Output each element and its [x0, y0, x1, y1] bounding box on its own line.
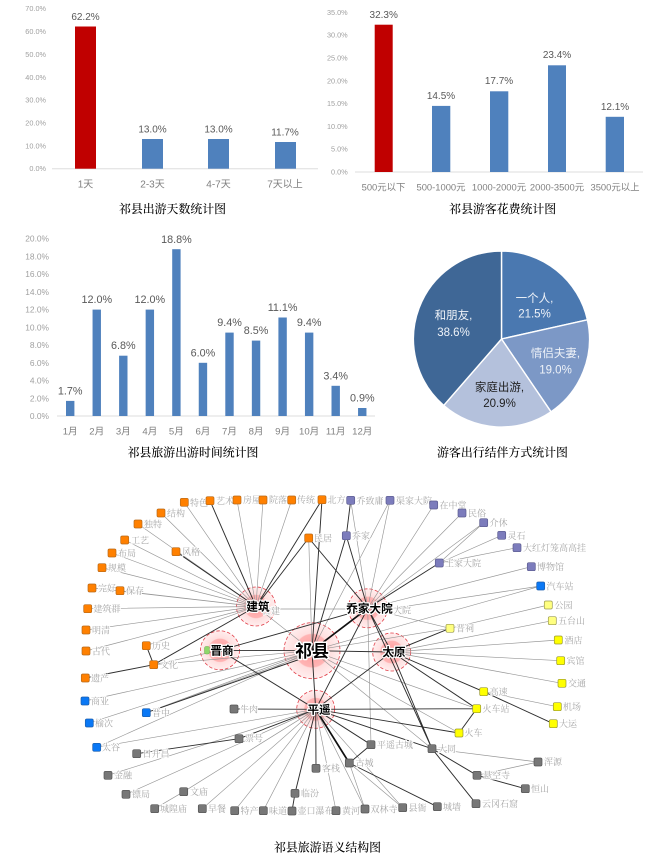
hub labels: 建筑: [246, 600, 270, 614]
bar chart: trip duration: 62.2%: [71, 12, 100, 23]
nodes: blue places: 商业: [91, 694, 109, 708]
bar chart: travel month: 0.9%: [350, 392, 375, 404]
nodes: Pingyao cluster: 县衙: [408, 801, 427, 814]
nodes: architecture cluster: 房屋: [243, 493, 261, 506]
nodes: architecture cluster: 独特: [144, 518, 162, 530]
nodes: Pingyao cluster: 壶口瀑布: [298, 804, 334, 817]
nodes: architecture cluster: 明清: [92, 624, 110, 636]
network graph: tourism semantic structure: [81, 493, 586, 817]
nodes: architecture cluster: 历史: [152, 639, 170, 652]
nodes: architecture cluster: 特色: [190, 496, 208, 509]
bar chart: travel month: 10月: [299, 426, 319, 438]
nodes: courtyard cluster: 灵石: [508, 529, 526, 542]
nodes: architecture cluster: [81, 493, 346, 684]
nodes: Pingyao cluster: 城隍庙: [160, 802, 187, 815]
pie labels: [435, 292, 580, 410]
bar chart: travel month: 12.0%: [135, 294, 166, 306]
nodes: architecture cluster: 风格: [182, 545, 200, 558]
bar chart: travel month: 20.0%: [25, 234, 50, 244]
nodes: Pingyao cluster: 悬空寺: [483, 768, 510, 782]
bar chart: trip duration: [25, 4, 318, 191]
bar chart: travel month: 11月: [326, 426, 345, 438]
nodes: transport and lodging: 高速: [490, 685, 508, 698]
bar chart: tourist spending: 35.0%: [327, 8, 348, 17]
hidden hub labels: [262, 604, 411, 617]
bar chart: trip duration: 20.0%: [25, 118, 46, 128]
nodes: Pingyao cluster: 日升昌: [142, 747, 170, 760]
nodes: transport and lodging: 宾馆: [566, 654, 585, 667]
nodes: courtyard cluster: 大红灯笼高高挂: [523, 541, 586, 554]
nodes: Pingyao cluster: 文庙: [190, 785, 208, 798]
title: travel month: 祁县旅游出游时间统计图: [128, 444, 259, 461]
bar chart: travel month: 16.0%: [25, 269, 50, 279]
bar chart: tourist spending: 12.1%: [601, 102, 629, 113]
nodes: transport and lodging: 火车: [464, 726, 483, 739]
nodes: Pingyao cluster: 临汾: [301, 786, 319, 800]
slice: family 20.9%: [444, 339, 551, 427]
nodes: architecture cluster: 艺术: [216, 494, 234, 507]
hub labels: [210, 600, 406, 716]
nodes: architecture cluster: 古代: [92, 644, 110, 658]
bar chart: tourist spending: 500元以下: [362, 182, 405, 192]
hub labels: 晋商: [210, 644, 234, 658]
bar chart: tourist spending: 30.0%: [327, 31, 348, 40]
bar chart: travel month: 12.0%: [81, 294, 112, 306]
nodes: architecture cluster: 保存: [126, 584, 144, 597]
nodes: courtyard cluster: 介休: [490, 516, 508, 529]
bar chart: travel month: 8.5%: [244, 325, 269, 337]
nodes: scenic spots: [446, 598, 585, 634]
nodes: Pingyao cluster: 味道: [269, 804, 287, 817]
nodes: Pingyao cluster: 恒山: [531, 782, 549, 795]
bar chart: tourist spending: 10.0%: [327, 122, 348, 131]
nodes: Pingyao cluster: 牛肉: [240, 702, 258, 716]
bar chart: tourist spending: 5.0%: [331, 145, 348, 154]
bar chart: trip duration: 13.0%: [204, 124, 233, 136]
nodes: Pingyao cluster: 特产: [240, 804, 259, 817]
nodes: architecture cluster: 传统: [297, 493, 315, 506]
bar chart: travel month: 7月: [222, 426, 237, 438]
nodes: transport and lodging: 交通: [568, 676, 586, 690]
hub halos: [200, 587, 411, 728]
bar chart: travel month: 3月: [116, 426, 131, 438]
bar chart: travel month: 14.0%: [25, 287, 50, 297]
bar chart: trip duration: 50.0%: [25, 50, 46, 59]
bar chart: travel month: 18.0%: [25, 251, 50, 261]
bar chart: travel month: 11.1%: [268, 302, 298, 314]
bar chart: trip duration: 4-7天: [206, 180, 231, 190]
nodes: transport and lodging: 机场: [563, 700, 581, 713]
nodes: Pingyao cluster: 云冈石窟: [482, 797, 518, 810]
heavy edges: [312, 608, 368, 763]
nodes: Pingyao cluster: 浑源: [544, 755, 563, 768]
hub labels: 太原: [382, 645, 406, 659]
bar chart: tourist spending: 3500元以上: [591, 182, 639, 192]
bar chart: trip duration: 70.0%: [25, 4, 46, 13]
nodes: courtyard cluster: 民俗: [468, 506, 486, 520]
hub labels: 平遥: [307, 704, 331, 716]
hub labels: 乔家大院: [346, 602, 393, 616]
bar chart: tourist spending: 1000-2000元: [472, 182, 526, 192]
bar chart: travel month: [25, 234, 375, 438]
bar chart: travel month: 2月: [89, 426, 104, 438]
pie labels: 情侣夫妻,: [531, 346, 580, 360]
bar chart: trip duration: 1天: [78, 180, 93, 190]
title: trip duration: 祁县出游天数统计图: [119, 200, 226, 217]
bar chart: trip duration: 0.0%: [29, 164, 47, 173]
nodes: scenic spots: 晋祠: [456, 622, 474, 634]
bar chart: tourist spending: 500-1000元: [416, 182, 466, 192]
nodes: Pingyao cluster: 平遥古城: [377, 738, 413, 751]
slice: alone 21.5%: [502, 251, 587, 339]
bar chart: travel month: 8月: [249, 426, 264, 438]
nodes: transport and lodging: 火车站: [482, 702, 510, 715]
nodes: transport and lodging: 大运: [559, 717, 578, 730]
bar chart: tourist spending: 15.0%: [327, 99, 348, 108]
bar chart: tourist spending: 32.3%: [370, 10, 398, 21]
slice: couple 19.0%: [502, 320, 590, 412]
nodes: Pingyao cluster: 黄河: [342, 804, 360, 817]
nodes: blue places: 汽车站: [546, 580, 574, 592]
nodes: blue places: [81, 580, 574, 754]
bar chart: trip duration: 10.0%: [25, 141, 46, 150]
nodes: blue places: 晋中: [152, 706, 170, 719]
nodes: architecture cluster: 院落: [269, 493, 287, 506]
nodes: Pingyao cluster: 大同: [438, 742, 456, 755]
nodes: courtyard cluster: 乔家: [352, 529, 370, 542]
pie labels: 20.9%: [483, 398, 516, 410]
nodes: architecture cluster: 布局: [118, 546, 136, 560]
nodes: courtyard cluster: 在中堂: [440, 498, 467, 512]
nodes: Pingyao cluster: 早餐: [208, 802, 226, 815]
bar chart: trip duration: 7天以上: [267, 178, 303, 190]
title: tourist spending: 祁县游客花费统计图: [449, 200, 556, 217]
nodes: transport and lodging: 酒店: [564, 634, 583, 646]
title: travel companions: 游客出行结伴方式统计图: [437, 444, 568, 461]
bar chart: trip duration: 11.7%: [271, 128, 299, 138]
pie labels: 和朋友,: [435, 308, 472, 322]
bar chart: travel month: 12月: [352, 426, 372, 438]
bar chart: travel month: 6.0%: [30, 358, 50, 368]
nodes: Pingyao cluster: 客栈: [322, 762, 340, 774]
bar chart: travel month: 4月: [142, 426, 157, 438]
bar chart: travel month: 1.7%: [58, 386, 83, 398]
bar chart: travel month: 6.8%: [111, 340, 136, 352]
nodes: blue places: 榆次: [95, 716, 113, 730]
nodes: Pingyao cluster: 票号: [245, 732, 263, 744]
bar chart: travel month: 9.4%: [217, 317, 242, 329]
nodes: courtyard cluster: 乔致庸: [356, 494, 384, 507]
bar chart: trip duration: 60.0%: [25, 27, 46, 36]
nodes: courtyard cluster: 王家大院: [445, 556, 481, 570]
light edges: [85, 500, 562, 811]
nodes: Pingyao cluster: [104, 702, 563, 817]
pie labels: 19.0%: [539, 364, 572, 376]
bar chart: tourist spending: 25.0%: [327, 54, 348, 62]
nodes: architecture cluster: 建筑群: [94, 602, 121, 615]
bar chart: tourist spending: [327, 8, 643, 193]
bar chart: travel month: 9月: [275, 426, 290, 438]
bar chart: travel month: 1月: [63, 426, 78, 438]
nodes: courtyard cluster: [342, 494, 586, 573]
pie labels: 38.6%: [437, 327, 470, 339]
nodes: courtyard cluster: 渠家大院: [396, 494, 432, 507]
nodes: architecture cluster: 民居: [314, 532, 332, 544]
nodes: architecture cluster: 北方: [328, 493, 346, 506]
nodes: architecture cluster: 工艺: [131, 534, 149, 546]
pie labels: 一个人,: [516, 292, 553, 305]
hidden hub labels: 古建: [262, 604, 280, 617]
bar chart: tourist spending: 20.0%: [327, 76, 348, 85]
bar chart: travel month: 6.0%: [191, 348, 216, 360]
bar chart: travel month: 0.0%: [30, 411, 50, 421]
nodes: architecture cluster: 结构: [167, 506, 185, 520]
pie labels: 21.5%: [518, 308, 551, 320]
bar chart: tourist spending: 17.7%: [485, 76, 513, 87]
bar chart: travel month: 3.4%: [323, 370, 348, 382]
nodes: scenic spots: 公园: [554, 598, 573, 612]
nodes: Pingyao cluster: 金融: [114, 768, 133, 782]
bar chart: tourist spending: 0.0%: [331, 168, 348, 176]
nodes: courtyard cluster: 博物馆: [537, 560, 564, 573]
bar chart: travel month: 18.8%: [161, 234, 192, 246]
bar chart: travel month: 10.0%: [25, 322, 50, 332]
nodes: transport and lodging: [455, 634, 586, 739]
hub labels: 祁县: [295, 642, 329, 661]
hidden hub labels: 大院: [393, 604, 411, 616]
nodes: scenic spots: 五台山: [558, 614, 585, 627]
bar chart: travel month: 2.0%: [30, 393, 50, 403]
node: Jinshang marker: [204, 646, 210, 654]
bar chart: trip duration: 40.0%: [25, 73, 46, 82]
nodes: Pingyao cluster: 镖局: [132, 788, 150, 800]
nodes: architecture cluster: 遗产: [91, 672, 109, 684]
bar chart: tourist spending: 2000-3500元: [530, 182, 584, 192]
nodes: architecture cluster: 文化: [160, 658, 178, 671]
slice: friends 38.6%: [413, 251, 502, 405]
bar chart: travel month: 9.4%: [297, 317, 322, 329]
bar chart: travel month: 4.0%: [30, 376, 50, 386]
bar chart: trip duration: 30.0%: [25, 96, 46, 105]
nodes: Pingyao cluster: 城墙: [443, 800, 461, 813]
bar chart: trip duration: 13.0%: [138, 124, 167, 136]
bar chart: travel month: 6月: [195, 426, 210, 438]
pie labels: 家庭出游,: [475, 380, 524, 394]
nodes: Pingyao cluster: 古城: [356, 756, 374, 769]
pie chart: travel companions: [413, 251, 590, 427]
bar chart: travel month: 5月: [169, 426, 184, 438]
nodes: Pingyao cluster: 双林寺: [370, 802, 398, 816]
dark edges: [85, 500, 553, 811]
bar chart: tourist spending: 14.5%: [427, 91, 455, 102]
bar chart: tourist spending: 23.4%: [543, 50, 571, 61]
nodes: blue places: 太谷: [102, 740, 120, 754]
bar chart: trip duration: 2-3天: [140, 180, 165, 190]
title: semantic structure: 祁县旅游语义结构图: [274, 838, 381, 855]
bar chart: travel month: 8.0%: [30, 340, 50, 350]
nodes: architecture cluster: 规模: [108, 561, 126, 574]
bar chart: travel month: 12.0%: [25, 305, 50, 315]
nodes: architecture cluster: 完好: [98, 582, 116, 594]
